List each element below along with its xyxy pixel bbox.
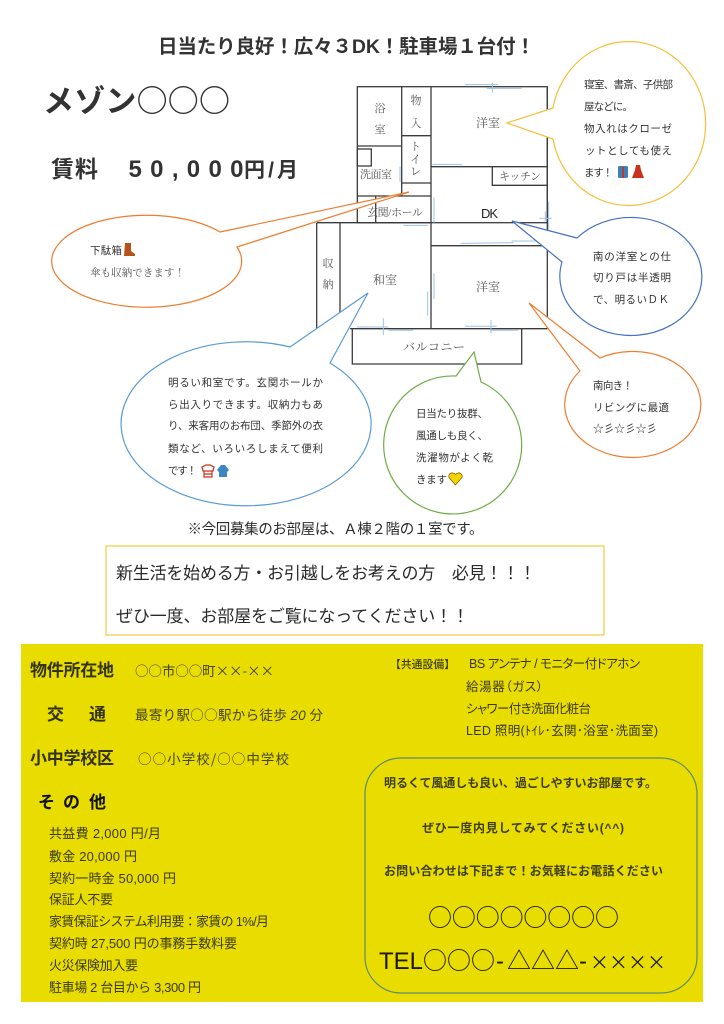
floor plan walls <box>317 87 547 364</box>
callout: western room north: ます！ <box>584 167 613 179</box>
shared facilities: シャワー付き洗面化粧台 <box>466 701 591 716</box>
callout: western room south: ☆彡☆彡☆彡 <box>593 421 657 436</box>
rent <box>51 156 298 183</box>
icon: dress <box>632 165 644 178</box>
transport: 交 <box>47 705 64 724</box>
contact box: △△△ <box>507 941 579 976</box>
room labels: 入 <box>410 117 422 130</box>
contact box: ×××× <box>590 948 666 975</box>
room labels <box>322 93 541 354</box>
icon: blue shirt <box>217 465 229 477</box>
callout: Japanese room: 類など、いろいろしまえて便利 <box>168 442 323 455</box>
room labels: 玄関/ホール <box>367 205 423 219</box>
address <box>30 660 274 680</box>
room labels: レ <box>410 166 421 178</box>
room labels: 浴 <box>374 102 386 115</box>
contact box: - <box>496 948 504 975</box>
transport: 最寄り駅○○駅から徒歩 20 分 <box>135 704 324 724</box>
panel: property details <box>21 644 703 1002</box>
callout: DK <box>512 217 702 335</box>
transport <box>47 704 324 724</box>
rent: 円/月 <box>244 159 298 182</box>
address: ○○市○○町××-×× <box>135 660 274 680</box>
room labels: 和室 <box>373 273 397 287</box>
school district: ○○小学校/○○中学校 <box>138 748 290 768</box>
callout: DK: で、明るいＤＫ <box>593 294 669 306</box>
callout: balcony <box>384 352 522 514</box>
room labels: 洋室 <box>476 116 500 130</box>
callout: shoe cupboard: 下駄箱 <box>90 244 122 257</box>
callout: western room south <box>529 303 701 457</box>
callout: balcony: 洗濯物がよく乾 <box>416 451 494 464</box>
contact box: 明るくて風通しも良い、過ごしやすいお部屋です。 <box>384 775 657 790</box>
callout: western room north: ットとしても使え <box>585 144 672 157</box>
room labels: ト <box>410 141 421 153</box>
rent: 賃料 <box>51 156 98 182</box>
room labels: 室 <box>374 122 386 136</box>
contact box: TEL <box>379 948 423 975</box>
title: 日当たり良好！広々３DK！駐車場１台付！ <box>158 35 535 58</box>
other heading: の <box>63 793 80 812</box>
contact box <box>365 758 697 993</box>
rent: 50,000 <box>128 156 244 183</box>
icon: shirt <box>618 166 628 178</box>
callout: shoe cupboard <box>52 192 409 307</box>
other conditions list: 火災保険加入要 <box>49 958 138 973</box>
callout: Japanese room: 明るい和室です。玄関ホールか <box>168 376 324 389</box>
callout: balcony: きます <box>416 474 447 486</box>
icon: heart <box>449 473 462 485</box>
school district: 小中学校区 <box>30 748 114 768</box>
callout: DK: 南の洋室との仕 <box>593 250 672 263</box>
room labels: キッチン <box>499 170 541 183</box>
shared facilities <box>390 657 658 738</box>
note: ※今回募集のお部屋は、Ａ棟２階の１室です。 <box>188 521 484 538</box>
faint blue editing marks <box>357 83 552 335</box>
room labels: 納 <box>322 277 334 291</box>
shared facilities: 給湯器（ガス） <box>466 680 543 694</box>
other heading: 他 <box>89 793 106 812</box>
callout: balcony: 風通しも良く、 <box>416 429 488 442</box>
room labels: バルコニー <box>403 340 465 354</box>
callout: Japanese room: り、来客用のお布団、季節外の衣 <box>168 419 324 432</box>
room labels: 収 <box>322 256 334 270</box>
icon: red shirt <box>202 465 214 477</box>
other conditions list: 保証人不要 <box>49 892 113 907</box>
shared facilities: LED 照明(ﾄｲﾚ･玄関･浴室･洗面室) <box>466 724 658 738</box>
callout: western room north <box>507 42 706 206</box>
shared facilities: BS アンテナ / モニター付ドアホン <box>469 657 640 671</box>
room labels: イ <box>410 153 421 166</box>
message box: ぜひ一度、お部屋をご覧になってください！！ <box>116 607 469 626</box>
transport: 通 <box>89 705 106 724</box>
callout: western room south: 南向き！ <box>593 379 633 392</box>
address: 物件所在地 <box>30 661 114 680</box>
contact box: ○○○ <box>423 941 495 976</box>
contact box: ぜひ一度内見してみてください(^^) <box>422 820 624 835</box>
room labels: 物 <box>410 93 422 107</box>
floor plan <box>317 83 552 364</box>
message box <box>106 546 604 635</box>
other conditions list: 敷金 20,000 円 <box>49 849 137 864</box>
building name: メゾン○○○ <box>43 76 230 121</box>
other heading: そ <box>38 793 55 812</box>
callout: western room north: 物入れはクローゼ <box>584 122 672 135</box>
other conditions list: 家賃保証システム利用要：家賃の 1%/月 <box>49 914 269 929</box>
other conditions list <box>49 826 269 995</box>
icon: boot <box>124 243 135 256</box>
room labels: 洋室 <box>476 280 500 294</box>
callout: western room north: 屋などに。 <box>584 101 633 113</box>
callout: western room south: リビングに最適 <box>593 401 670 414</box>
message box: 新生活を始める方・お引越しをお考えの方 必見！！！ <box>116 564 536 583</box>
callout: Japanese room: ら出入りできます。収納力もあ <box>168 398 323 411</box>
school district <box>30 748 290 768</box>
callout: western room north: 寝室、書斎、子供部 <box>584 78 674 91</box>
shared facilities: 【共通設備】 <box>390 657 455 671</box>
other conditions list: 契約時 27,500 円の事務手数料要 <box>49 936 237 951</box>
callout: balcony: 日当たり抜群、 <box>416 407 488 420</box>
other conditions list: 駐車場 2 台目から 3,300 円 <box>49 980 201 995</box>
contact box: お問い合わせは下記まで！お気軽にお電話ください <box>384 863 663 878</box>
contact box: ○○○○○○○○ <box>428 898 619 933</box>
callout: Japanese room: です！ <box>168 465 197 477</box>
callout: Japanese room <box>121 293 371 506</box>
callout: DK: 切り戸は半透明 <box>593 271 671 284</box>
room labels: DK <box>481 206 498 221</box>
room labels: 洗面室 <box>360 167 392 181</box>
callout: shoe cupboard: 傘も収納できます！ <box>90 266 185 279</box>
other conditions list: 契約一時金 50,000 円 <box>49 871 176 886</box>
contact box: - <box>579 948 587 975</box>
other heading <box>38 793 106 812</box>
other conditions list: 共益費 2,000 円/月 <box>49 826 161 841</box>
